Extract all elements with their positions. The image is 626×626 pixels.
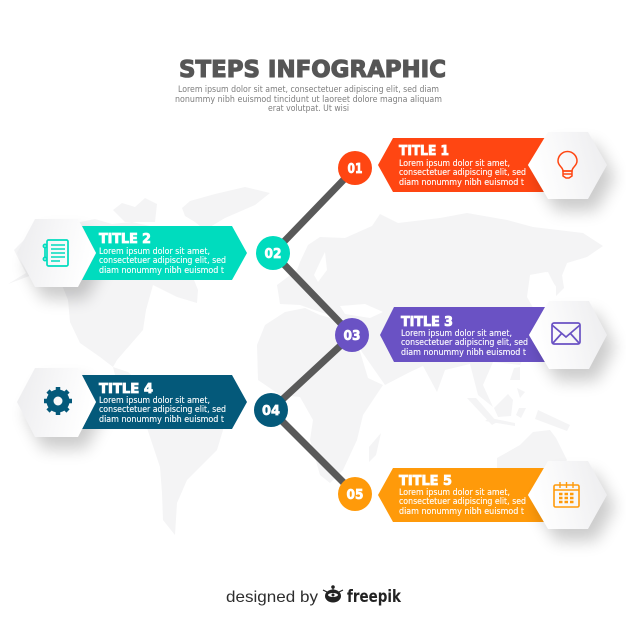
text: step 1 <box>399 158 526 187</box>
text: step 4: consectetuer adipiscing elit, sed <box>99 404 226 414</box>
text: freepik: freepik <box>347 587 402 606</box>
icon: envelope <box>552 323 580 344</box>
subtitle: Lorem ipsum dolor sit amet, consectetuer adipiscing elit, sed diam <box>178 85 439 95</box>
heading: title 4: TITLE 4 <box>99 382 153 397</box>
heading: title 2: TITLE 2 <box>99 232 151 247</box>
text: designed by: designed by <box>226 589 318 606</box>
text: step 3: consectetuer adipiscing elit, sed <box>401 337 528 347</box>
world map background <box>8 187 603 535</box>
step 2 <box>17 219 290 299</box>
footer credit <box>226 585 402 606</box>
text: step 4: Lorem ipsum dolor sit amet, <box>99 395 210 405</box>
hexagon 4 <box>17 368 96 437</box>
number: 05: 05 <box>346 487 364 503</box>
text: step 5: consectetuer adipiscing elit, sed <box>399 496 526 506</box>
connector lines <box>271 168 355 494</box>
text: step 5: diam nonummy nibh euismod t <box>399 506 525 516</box>
hexagon 1 <box>528 132 607 199</box>
title: STEPS INFOGRAPHIC <box>179 57 446 83</box>
number: 01: 01 <box>348 161 362 177</box>
heading: title 3: TITLE 3 <box>401 315 453 330</box>
icon: light bulb <box>558 152 577 178</box>
heading: title 5: TITLE 5 <box>399 474 452 489</box>
icon: freepik logo <box>323 585 343 602</box>
number: 03: 03 <box>344 328 360 344</box>
text: step 3: Lorem ipsum dolor sit amet, <box>401 328 512 338</box>
text: step 2 <box>99 246 226 275</box>
subtitle: nonummy nibh euismod tincidunt ut laoreet dolore magna aliquam <box>175 95 442 105</box>
text: step 4 <box>99 395 226 424</box>
banner: title 4 <box>82 375 247 429</box>
icon: calendar <box>554 482 579 507</box>
number: 04: 04 <box>262 403 280 419</box>
step 1 <box>338 132 615 211</box>
text: step 5: Lorem ipsum dolor sit amet, <box>399 487 510 497</box>
text: step 5 <box>399 487 526 516</box>
text: step 3: diam nonummy nibh euismod t <box>401 347 527 357</box>
icon: gear <box>44 387 72 415</box>
hexagon shadow 2 <box>25 231 104 299</box>
text: step 2: Lorem ipsum dolor sit amet, <box>99 246 210 256</box>
heading: title 1: TITLE 1 <box>399 144 449 159</box>
text: step 2: diam nonummy nibh euismod t <box>99 265 225 275</box>
number: 05 <box>338 477 372 511</box>
step 3 <box>335 301 615 381</box>
number: 02: 02 <box>264 246 282 262</box>
text: step 1: consectetuer adipiscing elit, sed <box>399 167 526 177</box>
banner: title 3 <box>380 307 545 362</box>
subtitle: erat volutpat. Ut wisi <box>268 104 349 114</box>
number: 03 <box>335 318 369 352</box>
number: 01 <box>338 151 372 185</box>
hexagon shadow 5 <box>536 473 615 541</box>
banner: title 5 <box>378 468 545 522</box>
number: 02 <box>256 236 290 270</box>
text: step 3 <box>401 328 528 357</box>
step 5 <box>338 461 615 541</box>
number: 04 <box>254 393 288 427</box>
step 4 <box>17 368 288 449</box>
banner: title 1 <box>378 138 545 192</box>
icon: notebook <box>43 240 68 266</box>
hexagon 2 <box>17 219 96 287</box>
hexagon shadow 4 <box>25 380 104 449</box>
text: step 4: diam nonummy nibh euismod t <box>99 414 225 424</box>
hexagon 5 <box>528 461 607 529</box>
banner: title 2 <box>82 226 247 280</box>
hexagon 3 <box>529 301 607 369</box>
subtitle <box>175 85 442 114</box>
text: step 1: Lorem ipsum dolor sit amet, <box>399 158 510 168</box>
text: step 2: consectetuer adipiscing elit, sed <box>99 255 226 265</box>
hexagon shadow 1 <box>536 144 615 211</box>
hexagon shadow 3 <box>537 313 615 381</box>
text: step 1: diam nonummy nibh euismod t <box>399 177 525 187</box>
